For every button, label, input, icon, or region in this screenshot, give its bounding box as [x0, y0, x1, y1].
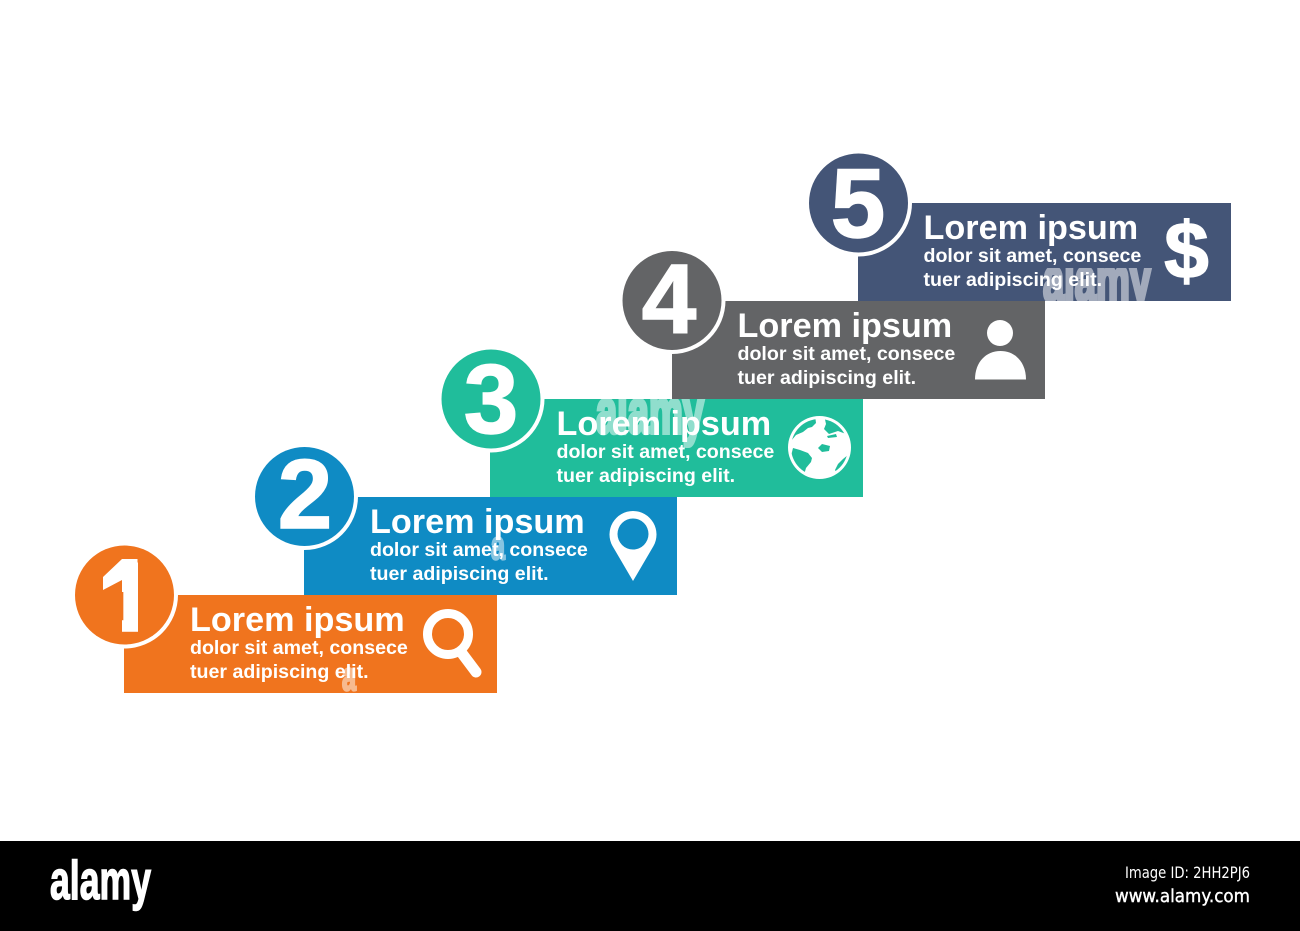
step 2 text: dolor sit amet, consece: [370, 539, 588, 561]
step 2 number badge: [251, 439, 358, 550]
icon: dollar: $: [1164, 206, 1209, 295]
icon: map pin: [610, 511, 656, 581]
step 4 text: [738, 307, 955, 389]
step 3 number badge: [438, 344, 544, 454]
watermark: middle: alamy: [596, 378, 704, 447]
footer image id: Image ID: 2HH2PJ6: [1125, 863, 1250, 882]
step 5 text: [924, 209, 1141, 291]
step 4 number badge: 4: [642, 244, 696, 354]
step 1 text: tuer adipiscing elit.: [190, 661, 369, 683]
step 2: location panel: [251, 439, 677, 595]
step 1 number badge: [75, 546, 178, 648]
step 4 text: dolor sit amet, consece: [738, 343, 955, 365]
footer logo: alamy: [50, 849, 151, 911]
step 4: person panel: [618, 244, 1045, 399]
step 2 text: tuer adipiscing elit.: [370, 563, 549, 585]
step 3: globe panel: [438, 344, 863, 497]
step 2 text: [370, 503, 588, 585]
watermark: top: alamy: [1043, 246, 1151, 315]
step 2 text: Lorem ipsum: [370, 503, 585, 541]
step 1 number badge: 1: [101, 542, 156, 652]
step 1 text: Lorem ipsum: [190, 601, 405, 639]
step 4 text: Lorem ipsum: [738, 307, 952, 345]
step 5 text: Lorem ipsum: [924, 209, 1138, 247]
step 3 text: dolor sit amet, consece: [556, 441, 774, 463]
step 1 text: [190, 601, 408, 683]
step 5 text: dolor sit amet, consece: [924, 245, 1141, 267]
footer bar: [0, 841, 1300, 931]
watermark: fragment on step 1: a: [342, 655, 356, 699]
step 5 number badge: [805, 148, 912, 258]
step 3 text: [556, 405, 774, 487]
step 4 number badge: [618, 244, 726, 354]
icon: person: [975, 320, 1026, 380]
step 3 number badge: 3: [464, 344, 518, 454]
step 3 text: tuer adipiscing elit.: [556, 465, 735, 487]
step 3 text: Lorem ipsum: [556, 405, 771, 443]
step 2 number badge: 2: [278, 439, 332, 549]
step 4 text: tuer adipiscing elit.: [738, 367, 916, 389]
step 5 text: tuer adipiscing elit.: [924, 269, 1102, 291]
step 1 text: dolor sit amet, consece: [190, 637, 408, 659]
step 5: dollar panel: [805, 148, 1231, 301]
step 1: search panel: [71, 542, 497, 693]
footer url: www.alamy.com: [1115, 886, 1250, 907]
step 5 number badge: 5: [831, 148, 885, 258]
icon: globe: [788, 415, 854, 479]
watermark: fragment on step 2: a: [491, 524, 505, 568]
icon: magnifier: [428, 614, 476, 672]
